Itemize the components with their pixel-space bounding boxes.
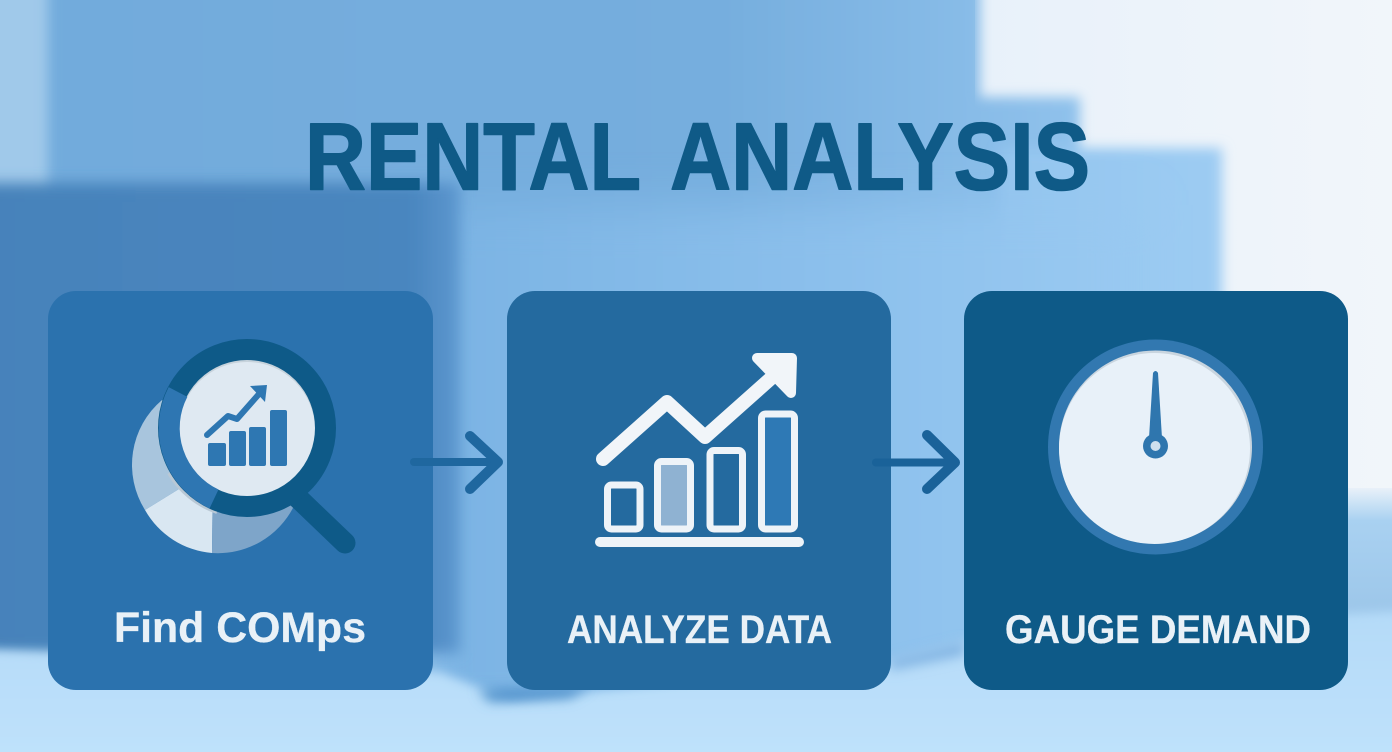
title: ANALYSIS	[670, 104, 1090, 210]
arrow: data to demand	[876, 435, 955, 489]
icon: gauge dial	[1048, 340, 1263, 554]
panel: gauge demand	[964, 291, 1348, 690]
icon: growth chart	[595, 358, 804, 547]
trend arrow	[603, 358, 792, 459]
mini bar chart	[208, 410, 287, 466]
arrow: comps to data	[414, 436, 498, 489]
needle	[1149, 371, 1162, 438]
baseline	[595, 537, 804, 547]
title: RENTAL	[305, 104, 641, 210]
panel: analyze data	[507, 291, 891, 690]
panel: find comps	[48, 291, 433, 690]
outlined bars	[608, 414, 794, 529]
card background: analyze data	[507, 291, 891, 690]
card background: find comps	[48, 291, 433, 690]
mini trend arrow	[207, 385, 267, 435]
label: find comps: Find COMps	[114, 604, 366, 652]
label: gauge demand: GAUGE DEMAND	[1005, 608, 1311, 652]
icon: magnifying glass	[168, 350, 345, 543]
title	[305, 104, 1090, 210]
card background: gauge demand	[964, 291, 1348, 690]
icon: pie chart behind magnifier	[132, 400, 294, 553]
label: analyze data: ANALYZE DATA	[567, 608, 832, 652]
needle hub	[1143, 434, 1168, 458]
